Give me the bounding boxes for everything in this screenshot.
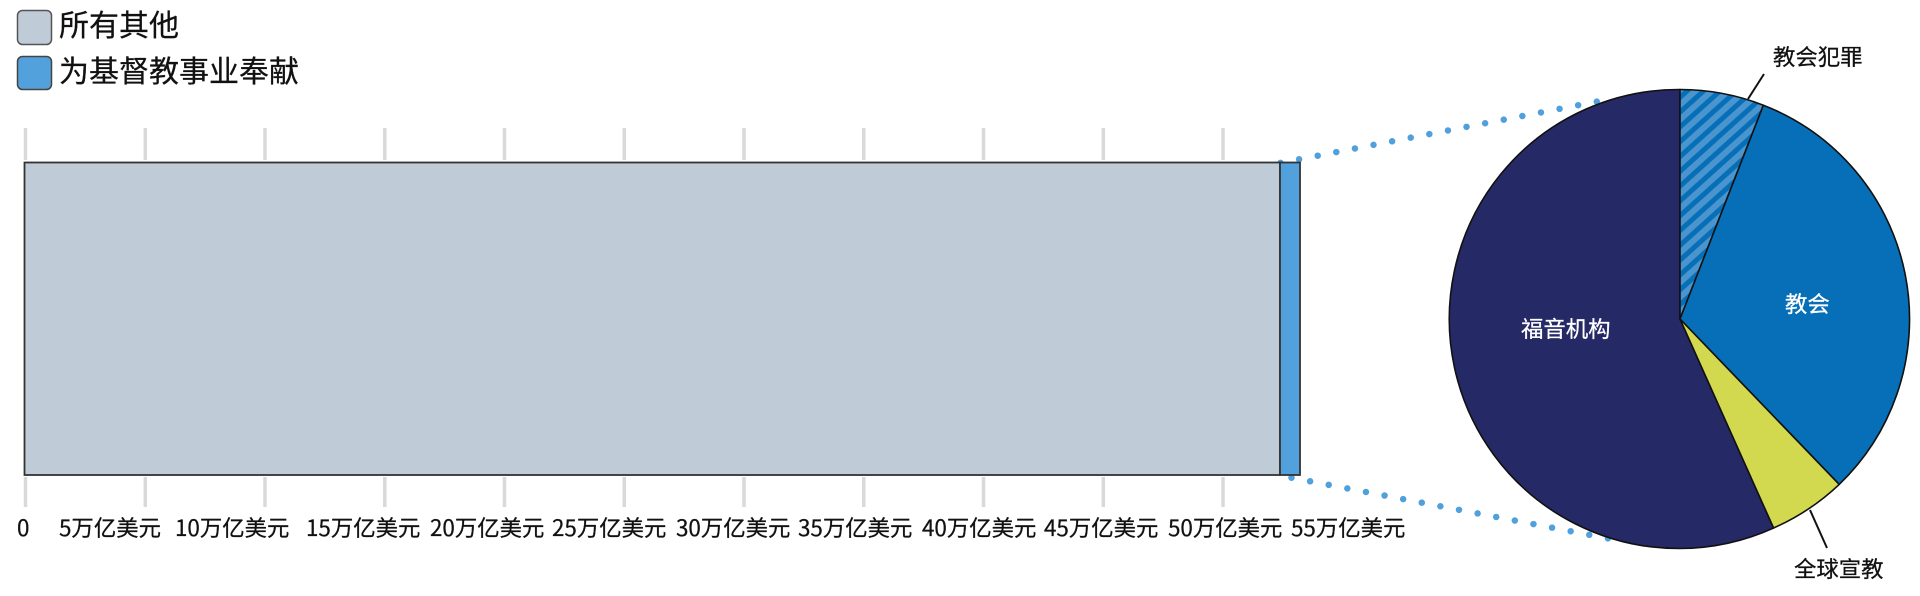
label: church: 教会 <box>1785 287 1830 319</box>
bar segment: all other <box>24 162 1280 475</box>
dotted connector lines <box>1280 101 1608 538</box>
axis labels: 35万亿美元 <box>798 511 912 543</box>
legend swatch: christian giving <box>18 56 52 90</box>
axis labels: 30万亿美元 <box>676 511 790 543</box>
bar segment: christian giving <box>1280 162 1300 475</box>
axis labels: 0 <box>17 511 29 543</box>
pie chart <box>1449 89 1910 548</box>
slice: global missions <box>1680 319 1839 528</box>
callout: global missions <box>1794 510 1884 584</box>
axis labels: 15万亿美元 <box>306 511 420 543</box>
callout: church crime <box>1748 40 1863 99</box>
axis labels <box>17 511 1405 543</box>
slice: church crime <box>1680 90 1763 319</box>
axis labels: 50万亿美元 <box>1168 511 1282 543</box>
pie slice labels <box>1521 287 1830 344</box>
axis labels: 40万亿美元 <box>922 511 1036 543</box>
axis labels: 45万亿美元 <box>1044 511 1158 543</box>
stacked bar <box>24 162 1300 475</box>
legend swatch: all other <box>18 10 52 44</box>
slice: parachurch <box>1449 89 1774 548</box>
callout: church crime: 教会犯罪 <box>1773 40 1863 72</box>
legend label: christian giving: 为基督教事业奉献 <box>59 47 299 91</box>
axis labels: 10万亿美元 <box>175 511 289 543</box>
axis labels: 25万亿美元 <box>552 511 666 543</box>
axis labels: 20万亿美元 <box>430 511 544 543</box>
axis labels: 5万亿美元 <box>59 511 161 543</box>
legend <box>18 1 299 91</box>
slice: church <box>1680 105 1910 484</box>
axis ticks <box>26 128 1223 507</box>
label: parachurch: 福音机构 <box>1521 312 1611 344</box>
legend label: all other: 所有其他 <box>59 1 179 45</box>
callout: global missions: 全球宣教 <box>1794 552 1884 584</box>
axis labels: 55万亿美元 <box>1291 511 1405 543</box>
